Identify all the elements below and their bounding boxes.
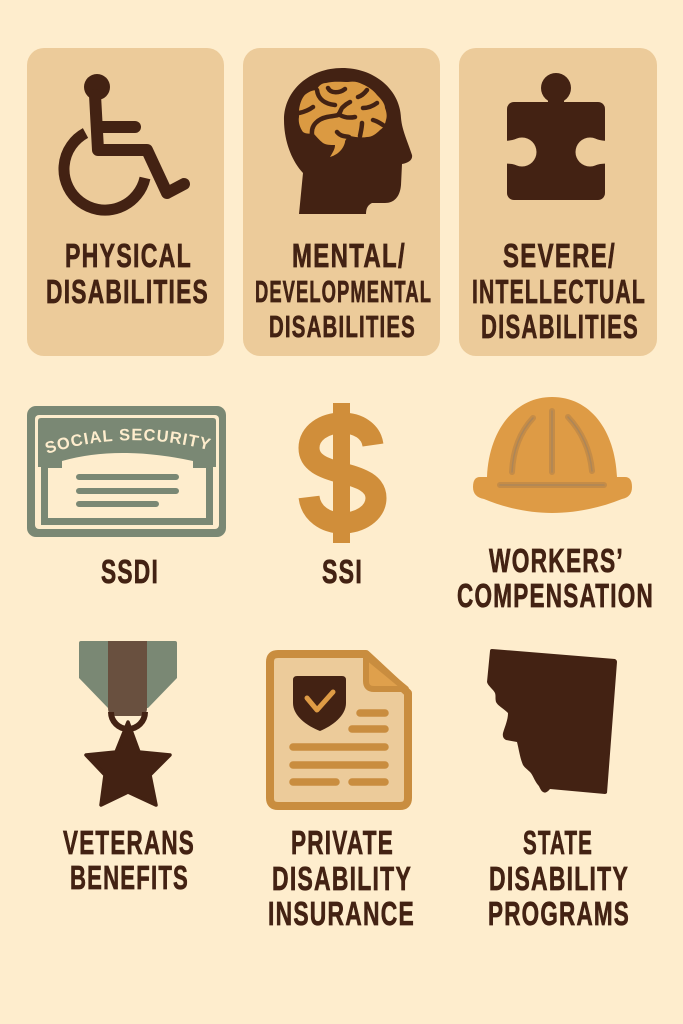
item: SSDI: [27, 406, 226, 590]
heading: physical disabilities: DISABILITIES: [46, 273, 209, 310]
label: state disability programs: STATE: [523, 824, 593, 861]
panel: severe and intellectual disabilities: [459, 48, 657, 356]
label: private disability insurance: INSURANCE: [268, 895, 415, 932]
label: veterans benefits: BENEFITS: [70, 859, 189, 896]
label: private disability insurance: DISABILITY: [272, 860, 412, 897]
label: veterans benefits: VETERANS: [63, 824, 195, 861]
label: workers' compensation: [457, 542, 654, 614]
icon: wheelchair: [64, 74, 184, 210]
icon: state outline: [487, 649, 617, 794]
panel: mental and developmental disabilities: [243, 48, 440, 356]
item: private disability insurance: [268, 654, 415, 932]
heading: severe intellectual disabilities: [472, 237, 646, 345]
icon: social security card: [27, 406, 226, 537]
label: workers' compensation: WORKERS’: [489, 542, 624, 579]
heading: severe intellectual disabilities: SEVERE/: [503, 237, 616, 274]
label: private disability insurance: PRIVATE: [291, 824, 394, 861]
heading: mental developmental disabilities: DISABILITIES: [269, 309, 416, 344]
label: private disability insurance: [268, 824, 415, 932]
icon: insurance document: [270, 654, 408, 806]
heading: mental developmental disabilities: MENTAL/: [292, 237, 406, 274]
item: state disability programs: [487, 649, 630, 932]
icon: head with brain: [284, 68, 412, 214]
heading: physical disabilities: PHYSICAL: [65, 237, 192, 274]
item: SSI: [309, 403, 376, 590]
label: state disability programs: [488, 824, 630, 932]
icon: hard hat: [473, 397, 632, 513]
label: SSI: SSI: [322, 553, 363, 590]
label: veterans benefits: [63, 824, 195, 896]
icon: medal with star: [79, 641, 177, 805]
heading: mental developmental disabilities: DEVELOPMENTAL: [255, 274, 432, 309]
label: SSDI: SSDI: [101, 553, 159, 590]
heading: physical disabilities: [46, 237, 209, 310]
item: workers' compensation: [457, 397, 654, 614]
icon: social security card: SOCIAL SECURITY: [46, 428, 212, 453]
item: veterans benefits: [63, 641, 195, 896]
icon: puzzle piece: [503, 73, 609, 200]
heading: mental developmental disabilities: [255, 237, 432, 344]
icon: dollar sign: [309, 403, 376, 543]
panel: physical disabilities: [27, 48, 224, 356]
